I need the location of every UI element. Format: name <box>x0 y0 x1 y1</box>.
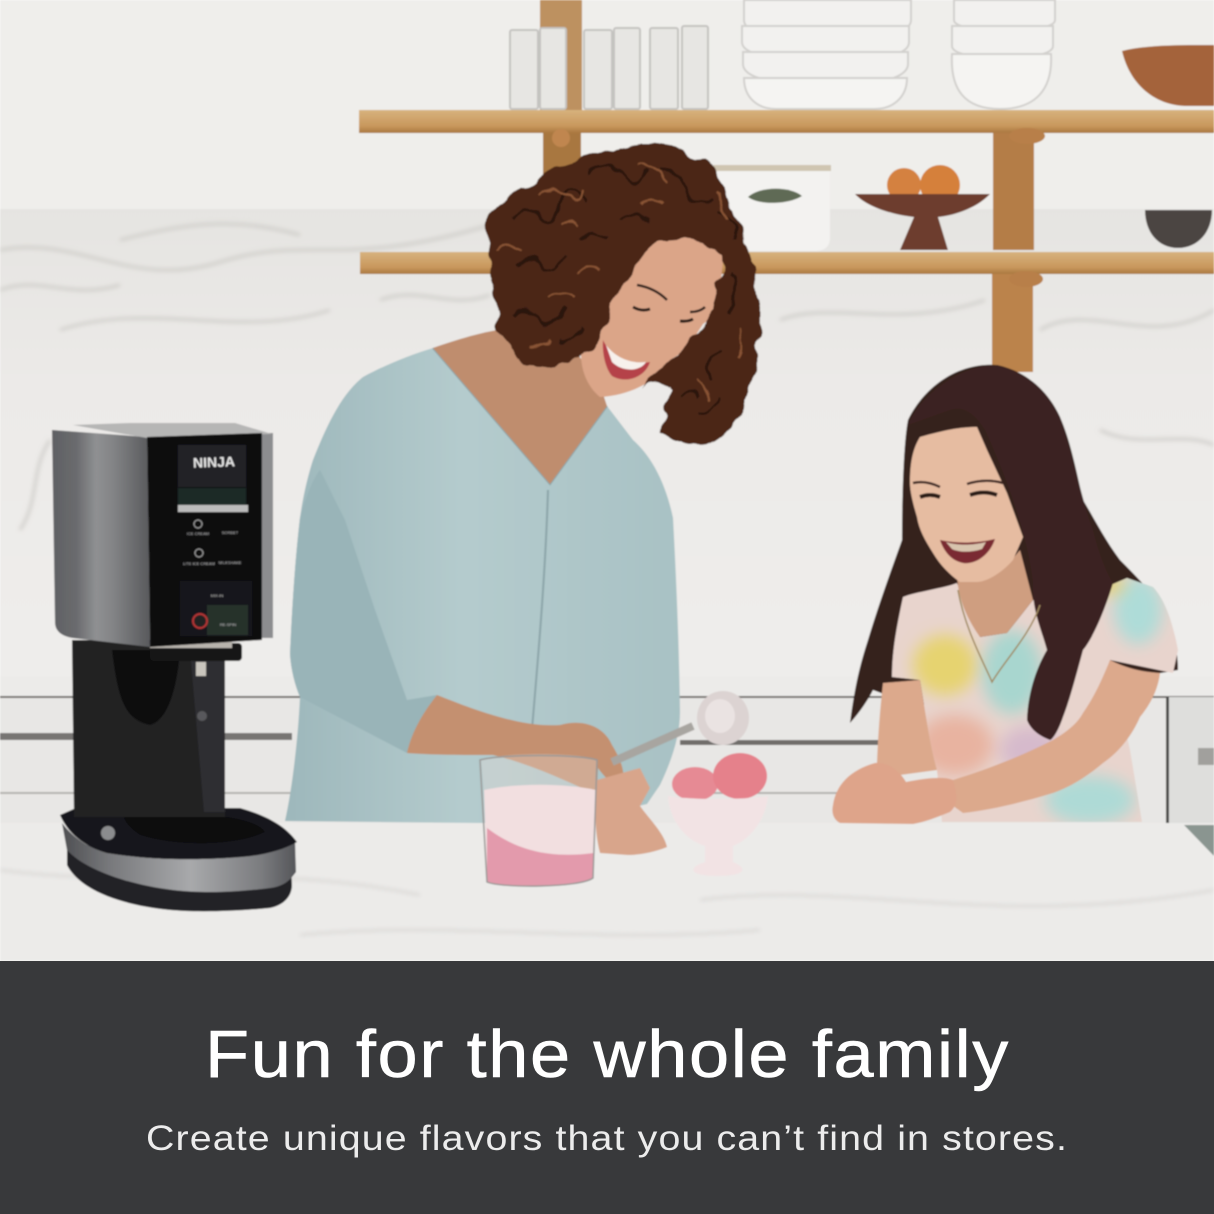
woman eyes and smile <box>603 285 705 380</box>
girl front hair <box>908 365 1113 740</box>
curly hair <box>487 144 760 446</box>
girl hands <box>832 763 956 824</box>
heading: Fun for the whole family <box>205 1017 1010 1092</box>
kitchen wall <box>0 0 1214 680</box>
girl neck <box>957 550 1033 637</box>
panel mode labels: MIX-IN <box>211 593 223 598</box>
panel mode labels <box>183 530 242 627</box>
counter top <box>0 823 1214 961</box>
woman <box>285 144 760 855</box>
machine base steel band <box>62 823 296 892</box>
sweater seams <box>433 348 607 742</box>
girl face <box>910 427 1023 582</box>
machine base top <box>60 808 297 859</box>
girl necklace <box>958 590 1040 682</box>
brand label: NINJA <box>193 453 235 471</box>
girl right arm <box>945 660 1160 813</box>
dark ceramic bowl <box>1145 210 1212 248</box>
ice cream scoop tool <box>612 691 749 762</box>
woman sweater <box>285 348 680 823</box>
panel mode labels: LITE ICE CREAM <box>183 561 215 566</box>
subheading: Create unique flavors that you can’t find in stores. <box>146 1118 1068 1158</box>
machine lid <box>73 423 272 438</box>
panel mode labels: ICE CREAM <box>187 531 209 536</box>
stacked white bowls <box>742 0 1055 109</box>
panel graphic lines <box>178 488 246 508</box>
girl left arm <box>877 680 937 775</box>
woman neck and chest <box>433 327 607 484</box>
far right counter item <box>1184 825 1214 856</box>
black control panel <box>147 433 262 647</box>
panel mode labels: MILKSHAKE <box>219 560 242 565</box>
girl shirt <box>892 575 1178 824</box>
girl <box>832 365 1178 824</box>
lower cabinets <box>0 676 1214 824</box>
photo: family making ice cream in kitchen <box>0 0 1214 961</box>
dessert glass with scoops <box>668 753 768 876</box>
wooden bowl <box>1122 45 1214 106</box>
panel mode labels: RE-SPIN <box>220 622 236 627</box>
steel housing <box>52 430 150 647</box>
machine base bottom <box>67 845 292 911</box>
woman face <box>581 230 723 397</box>
wooden shelves and uprights <box>359 0 1214 372</box>
ice cream tub <box>480 754 597 886</box>
panel mode labels: SORBET <box>222 530 239 535</box>
machine collar <box>150 643 242 661</box>
fruit stand with oranges <box>855 165 990 250</box>
girl eyes and smile <box>913 481 1003 563</box>
woman second hand <box>595 768 667 855</box>
white storage container <box>713 165 831 251</box>
girl hair back <box>850 365 1178 740</box>
black column <box>72 640 225 817</box>
woman arm <box>407 695 623 794</box>
glasses on shelf <box>510 26 708 109</box>
woman sleeve shading <box>290 470 437 753</box>
power button <box>193 614 207 628</box>
ice cream maker <box>52 423 297 911</box>
